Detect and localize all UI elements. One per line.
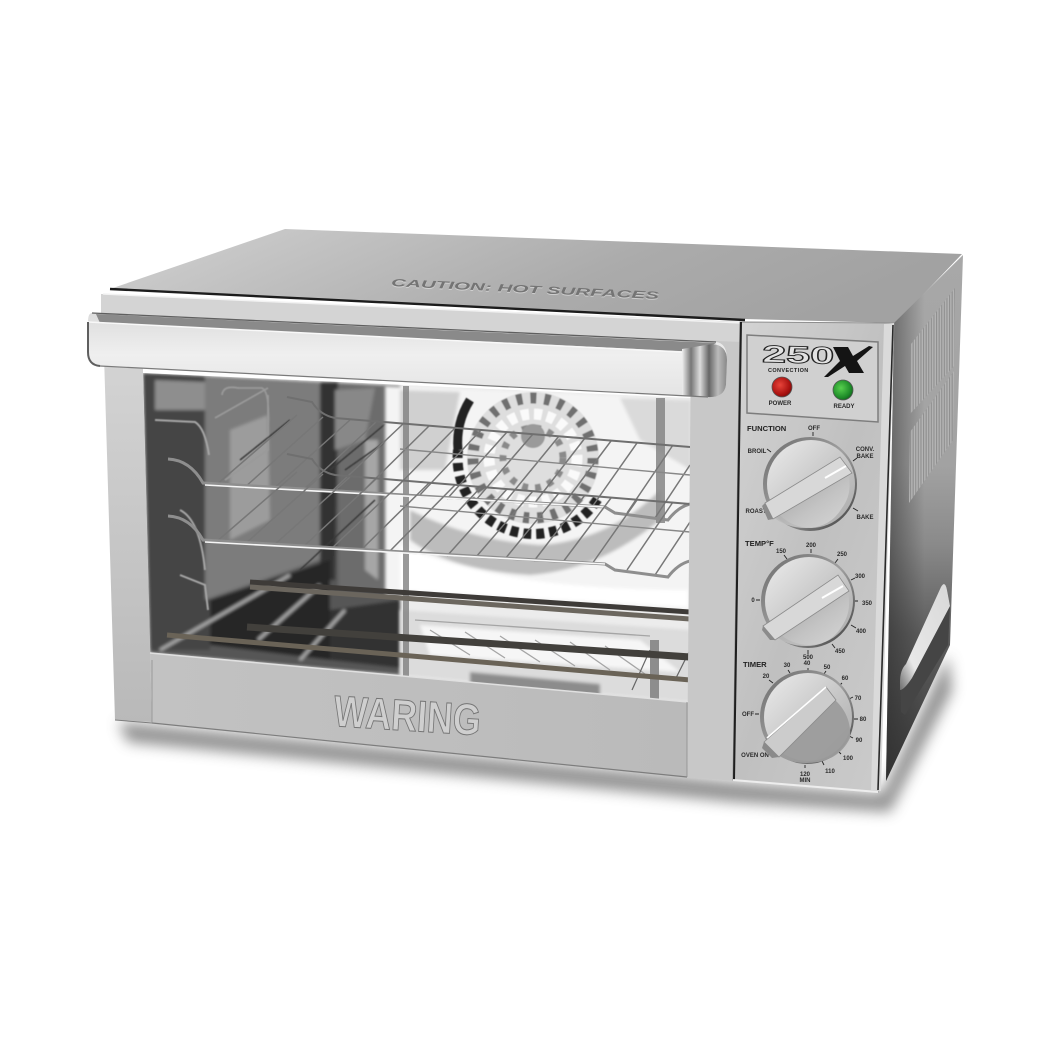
upper and lower oven racks <box>168 397 690 577</box>
WARING logo: WARING <box>332 687 482 745</box>
function dial <box>746 424 875 531</box>
function dial: ROAST <box>746 509 767 515</box>
bright interior right <box>385 386 691 702</box>
power light: POWER <box>769 401 792 407</box>
timer dial: 30 <box>784 663 791 669</box>
embossed caution text: CAUTION: HOT SURFACES <box>391 278 659 303</box>
embossed caution text <box>391 277 659 303</box>
oven right side <box>886 255 963 781</box>
temperature dial: 500 <box>803 655 814 661</box>
side handle <box>900 584 950 715</box>
timer dial: OVEN ON <box>741 753 769 759</box>
timer dial: 60 <box>842 676 849 682</box>
timer dial: 90 <box>856 738 863 744</box>
function dial: BAKE <box>856 515 874 521</box>
function dial: FUNCTION <box>747 424 786 433</box>
heating elements <box>167 582 690 680</box>
control panel <box>733 322 894 792</box>
timer dial: OFF <box>742 712 754 718</box>
function dial: BROIL <box>748 449 767 455</box>
timer dial: 70 <box>855 696 862 702</box>
temperature dial: 150 <box>776 549 787 555</box>
temperature dial: 400 <box>856 629 867 635</box>
function dial: OFF <box>808 426 820 432</box>
250X logo: CONVECTION <box>768 368 809 374</box>
window interior <box>143 373 691 702</box>
ready light: READY <box>833 404 855 410</box>
timer dial: MIN <box>800 778 810 784</box>
250X logo <box>762 341 873 377</box>
temperature dial: 0 <box>751 598 755 604</box>
function dial: CONV. <box>856 447 875 453</box>
door frame <box>103 322 742 781</box>
250X logo: 250 <box>762 341 835 370</box>
left interior chamber <box>143 373 400 675</box>
timer dial <box>741 660 867 784</box>
timer dial: 50 <box>824 665 831 671</box>
temperature dial: 200 <box>806 543 817 549</box>
door handle <box>88 313 727 397</box>
timer dial: TIMER <box>743 660 767 669</box>
timer dial: 100 <box>843 756 854 762</box>
temperature dial <box>745 539 873 661</box>
temperature dial: 250 <box>837 552 848 558</box>
temperature dial: 450 <box>835 649 846 655</box>
front top strip <box>101 289 745 350</box>
timer dial: 40 <box>804 661 811 667</box>
timer dial: 110 <box>825 769 835 775</box>
embossed caution text: CAUTION: HOT SURFACES <box>391 277 659 302</box>
ground shadow <box>118 655 952 812</box>
convection fan <box>458 392 600 534</box>
timer dial: 120 <box>800 772 811 778</box>
temperature dial: 300 <box>855 574 866 580</box>
side vents <box>909 288 955 503</box>
timer dial: 20 <box>763 674 770 680</box>
timer dial: 80 <box>860 717 867 723</box>
oven illustration <box>87 229 963 821</box>
chamber columns and lower reflections <box>403 386 690 700</box>
temperature dial: 350 <box>862 601 873 607</box>
oven top surface <box>110 229 962 323</box>
nameplate <box>747 335 878 422</box>
function dial: BAKE <box>856 454 874 460</box>
left rack details <box>155 387 395 610</box>
temperature dial: TEMP°F <box>745 539 774 548</box>
